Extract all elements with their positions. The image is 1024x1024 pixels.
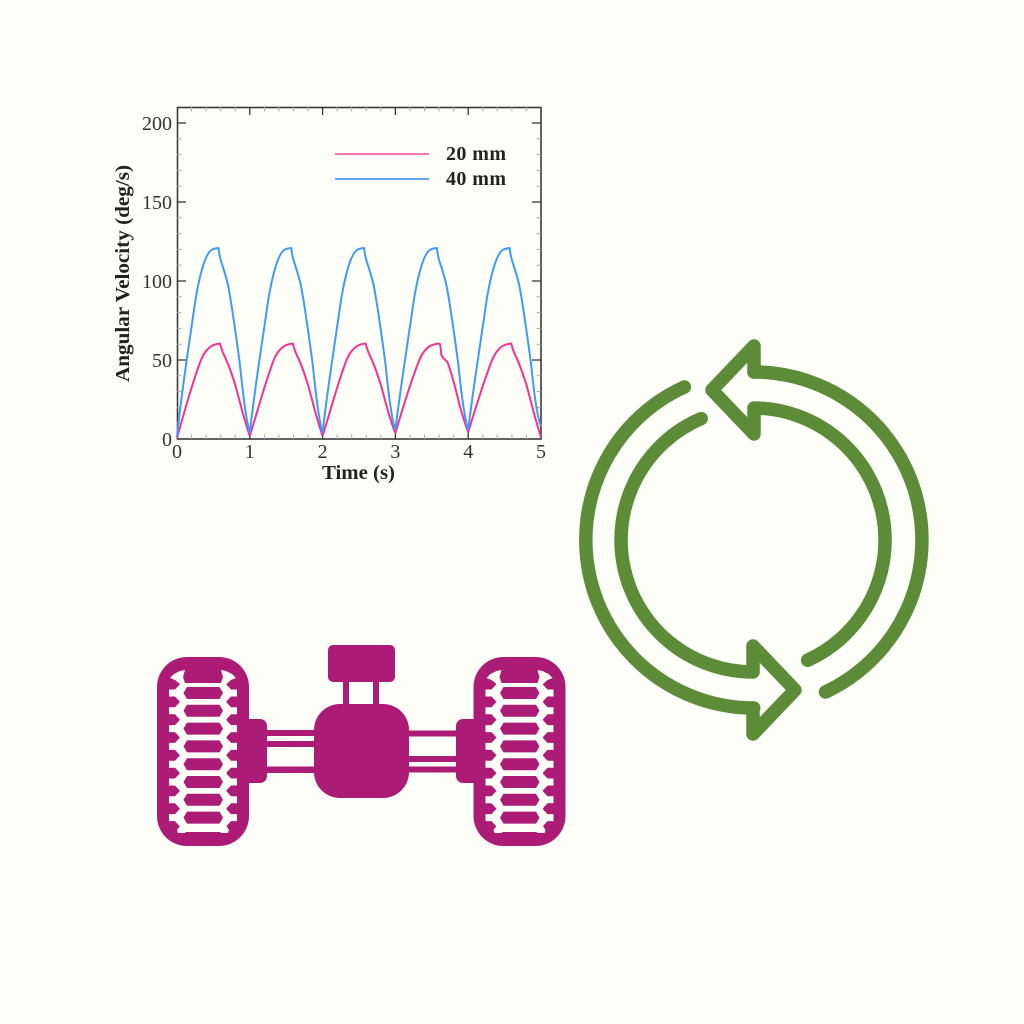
legend xyxy=(335,143,506,190)
x axis tick labels: 2 xyxy=(318,441,328,463)
top arrow head with inner right arc xyxy=(712,346,885,660)
legend: 40 mm xyxy=(446,168,506,190)
plot frame xyxy=(178,108,541,439)
y axis tick labels: 100 xyxy=(142,271,172,293)
bottom arrow head xyxy=(753,646,795,734)
outer right arc xyxy=(754,372,922,692)
icon: circular arrows xyxy=(586,346,922,734)
icon: robot chassis with tracked wheels xyxy=(157,645,566,846)
outer left arc xyxy=(586,387,754,708)
y axis tick labels: 50 xyxy=(152,350,172,372)
x axis tick labels: 0 xyxy=(172,441,182,463)
40 mm series xyxy=(177,248,541,437)
y axis tick labels: 0 xyxy=(162,429,172,451)
x axis tick labels: 5 xyxy=(536,441,546,463)
x axis tick labels: 1 xyxy=(245,441,255,463)
axis ticks xyxy=(177,107,541,439)
y axis tick labels xyxy=(142,113,172,451)
legend: 20 mm xyxy=(446,143,506,165)
x axis tick labels: 3 xyxy=(390,441,400,463)
y axis title: Angular Velocity (deg/s) xyxy=(112,165,134,382)
chassis body xyxy=(240,645,483,798)
20 mm series xyxy=(177,344,541,438)
x axis title: Time (s) xyxy=(322,462,395,484)
left tracked wheel xyxy=(157,657,249,846)
line chart: angular velocity vs time xyxy=(112,107,546,484)
y axis tick labels: 150 xyxy=(142,192,172,214)
right tracked wheel xyxy=(474,657,566,846)
x axis tick labels: 4 xyxy=(463,441,473,463)
y axis tick labels: 200 xyxy=(142,113,172,135)
x axis tick labels xyxy=(172,441,546,463)
inner left arc xyxy=(621,419,753,672)
